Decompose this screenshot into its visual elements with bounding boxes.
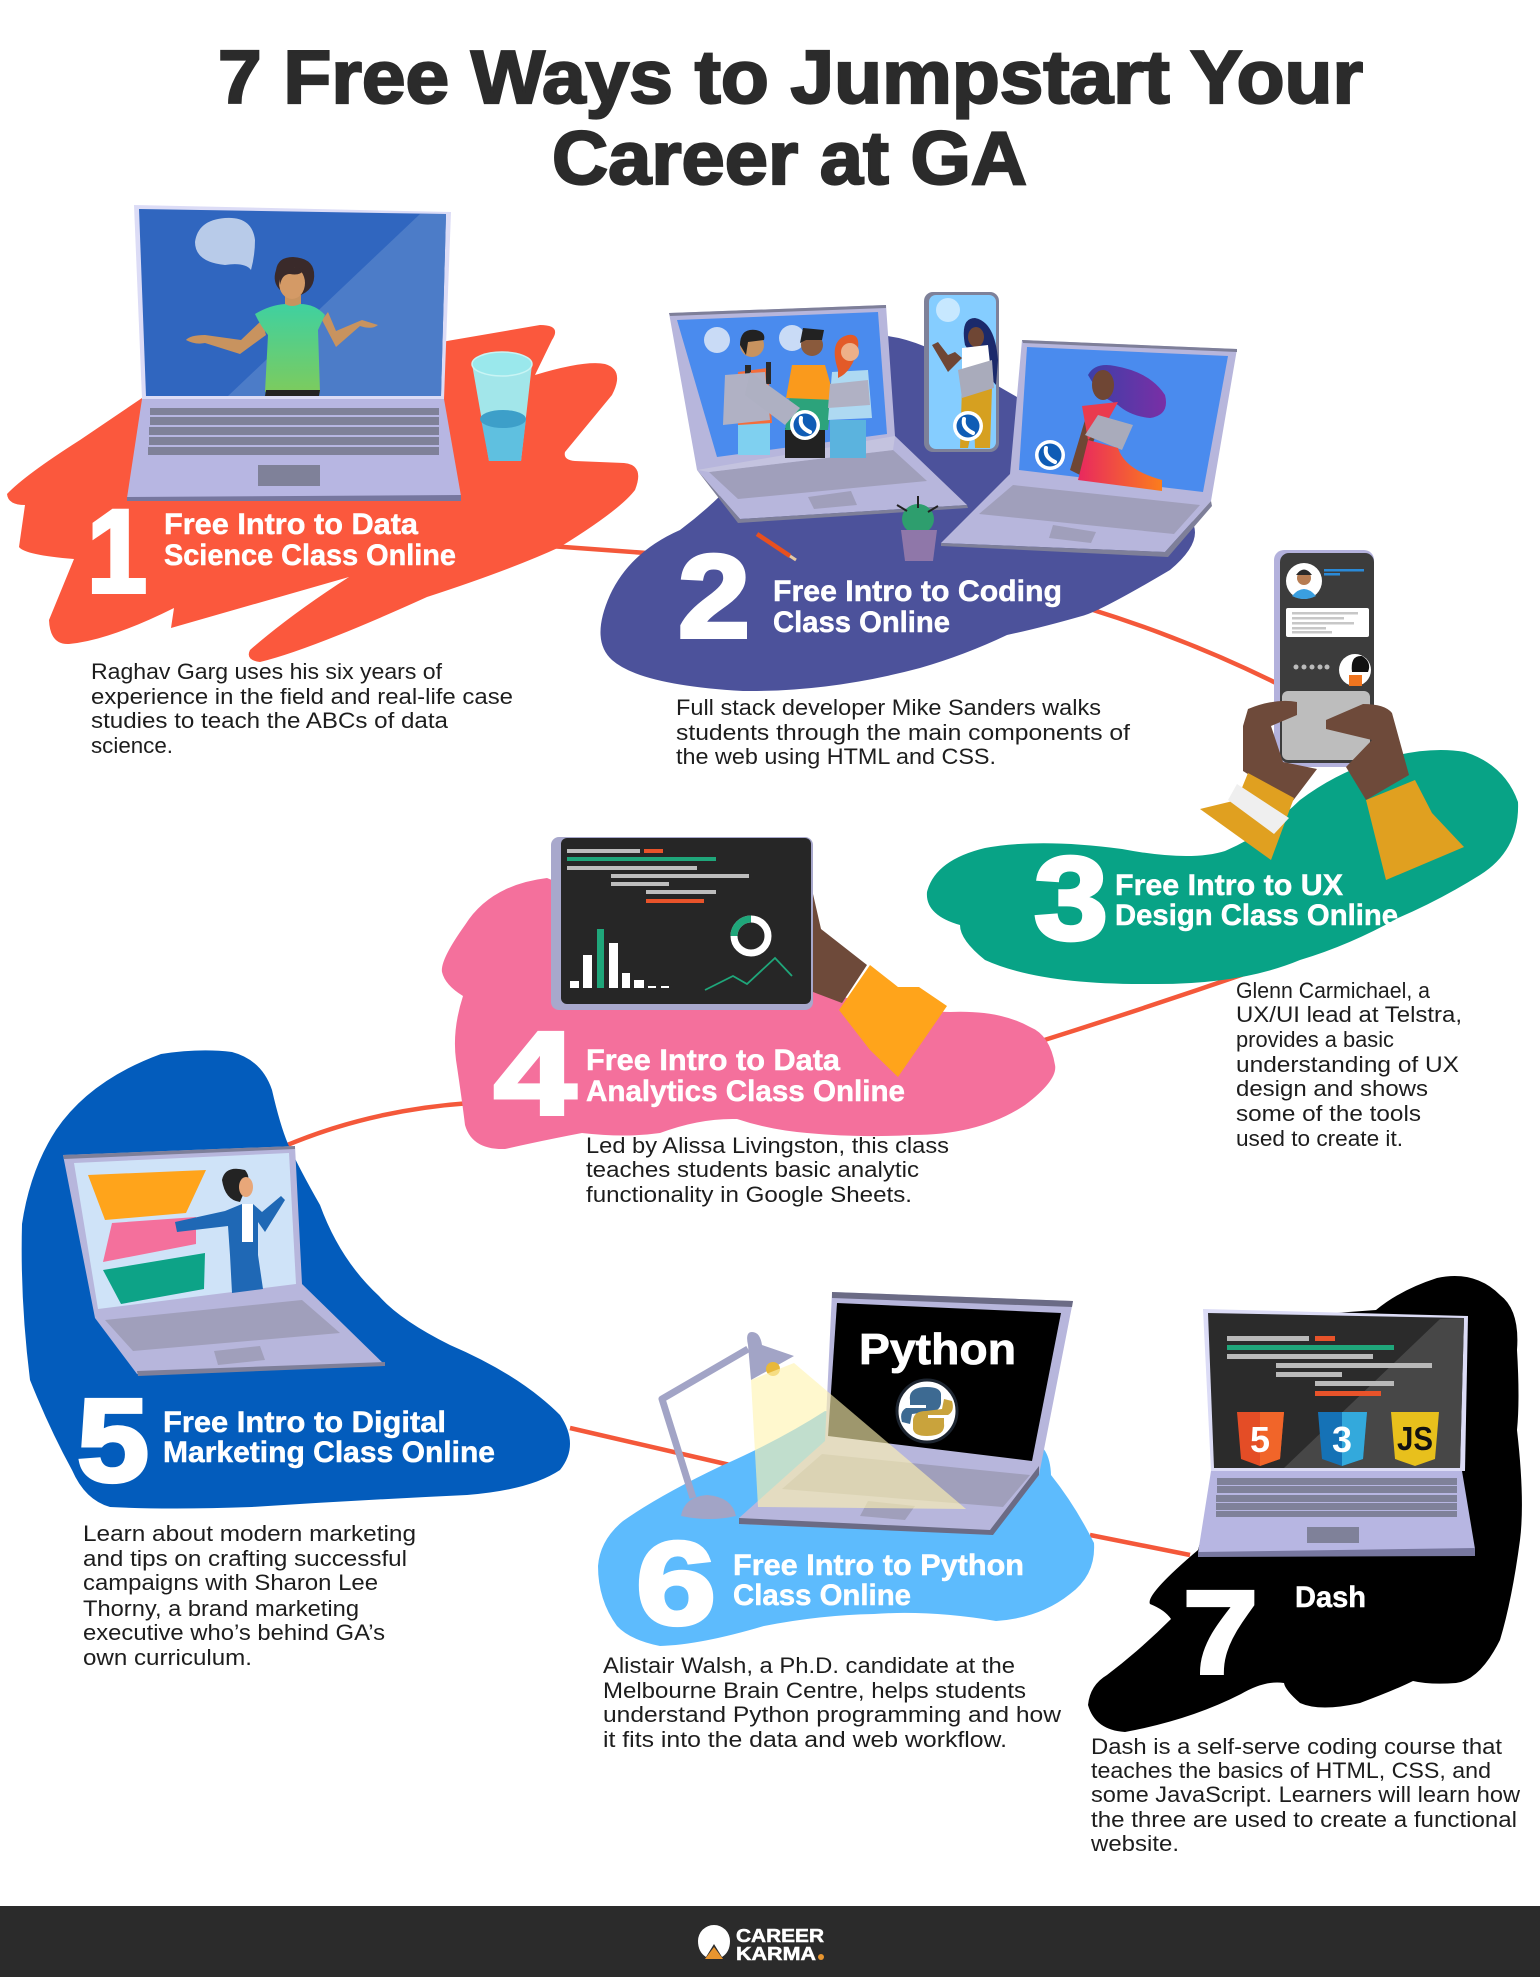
number 6: 6 xyxy=(636,1518,716,1650)
text block: step 3 description: Glenn Carmichael, a xyxy=(1236,978,1431,1003)
logo wordmark: CAREER xyxy=(736,1926,824,1946)
text block: step 4 description xyxy=(586,1133,949,1207)
icon: left sleeve xyxy=(1200,773,1294,860)
text block: step 7 description: the three are used to create a functional xyxy=(1091,1807,1517,1832)
number 3: 3 xyxy=(1034,833,1108,965)
text block: step 7 description: teaches the basics of HTML, CSS, and xyxy=(1091,1758,1491,1783)
icon: right sleeve xyxy=(1366,780,1464,880)
icon: laptop with presenter xyxy=(127,205,461,501)
title: 7 Free Ways to Jumpstart Your xyxy=(218,35,1363,119)
blob: green xyxy=(927,750,1518,984)
text block: step 3 description xyxy=(1236,978,1462,1151)
icon: phone with presenter xyxy=(924,292,999,452)
text block: step 2 description: Full stack developer Mike Sanders walks xyxy=(676,695,1101,720)
heading: step 3 xyxy=(1115,869,1398,932)
heading: step 3: Free Intro to UX xyxy=(1115,869,1343,902)
text block: step 6 description: understand Python programming and how xyxy=(603,1702,1061,1727)
panel: step 4 data analytics xyxy=(442,837,1055,1149)
text block: step 4 description: functionality in Google Sheets. xyxy=(586,1182,912,1207)
logo wordmark: KARMA xyxy=(736,1944,816,1964)
text block: step 1 description: studies to teach the ABCs of data xyxy=(91,708,449,733)
icon: laptop with python screen xyxy=(739,1292,1073,1535)
text block: step 5 description: own curriculum. xyxy=(83,1645,252,1670)
heading: step 2 xyxy=(773,575,1062,639)
icon: sleeve xyxy=(839,965,947,1077)
text block: step 1 description: Raghav Garg uses his six years of xyxy=(91,659,443,684)
heading: step 6 xyxy=(733,1549,1024,1612)
chart: bars xyxy=(570,929,669,988)
blob: pink xyxy=(442,878,1055,1149)
chart: line xyxy=(705,958,792,990)
blob: indigo xyxy=(600,336,1195,691)
text block: step 3 description: design and shows xyxy=(1236,1076,1428,1101)
icon: pencil xyxy=(757,534,796,560)
title xyxy=(218,35,1363,200)
heading: step 6: Class Online xyxy=(733,1579,911,1612)
text block: step 6 description xyxy=(603,1653,1061,1752)
text block: step 5 description: Thorny, a brand marketing xyxy=(83,1596,359,1621)
icon: career karma logo xyxy=(698,1925,730,1959)
text block: step 7 description: Dash is a self-serve coding course that xyxy=(1091,1734,1502,1759)
icon: call badge xyxy=(953,411,983,441)
icon: water glass xyxy=(472,352,532,461)
text block: step 4 description: teaches students basic analytic xyxy=(586,1157,919,1182)
icon: wristwatch xyxy=(1228,784,1289,834)
icon: python logo xyxy=(897,1380,957,1442)
icon: css3 shield: 3 xyxy=(1332,1419,1352,1460)
icon: left laptop with students xyxy=(669,305,968,523)
icon: laptop with presenter and chart xyxy=(63,1146,385,1376)
number 5: 5 xyxy=(77,1375,149,1507)
text block: step 1 description: science. xyxy=(91,733,173,758)
heading: step 2: Class Online xyxy=(773,606,950,639)
text block: step 4 description: Led by Alissa Livingston, this class xyxy=(586,1133,949,1158)
text block: step 5 description: and tips on crafting successful xyxy=(83,1546,407,1571)
text block: step 2 description: the web using HTML and CSS. xyxy=(676,744,996,769)
text block: step 1 description: experience in the field and real-life case xyxy=(91,684,513,709)
chart: donut xyxy=(734,919,768,953)
text block: step 3 description: used to create it. xyxy=(1236,1126,1403,1151)
text block: step 6 description: Melbourne Brain Centre, helps students xyxy=(603,1678,1026,1703)
text block: step 6 description: it fits into the data and web workflow. xyxy=(603,1727,1007,1752)
text block: step 6 description: Alistair Walsh, a Ph.D. candidate at the xyxy=(603,1653,1015,1678)
text block: step 7 description: website. xyxy=(1090,1831,1179,1856)
heading: step 4: Analytics Class Online xyxy=(586,1075,905,1108)
icon: cactus in pot xyxy=(897,496,938,561)
blob: black xyxy=(1088,1276,1522,1732)
number 2: 2 xyxy=(678,531,750,663)
text block: step 3 description: understanding of UX xyxy=(1236,1052,1459,1077)
panel: step 5 digital marketing xyxy=(22,1050,570,1508)
heading: step 3: Design Class Online xyxy=(1115,899,1398,932)
icon: hand holding tablet xyxy=(813,894,867,1003)
text block: step 2 description xyxy=(676,695,1131,769)
icon: laptop with code xyxy=(1198,1309,1475,1557)
heading: step 1: Free Intro to Data xyxy=(164,508,418,541)
text block: step 5 description: campaigns with Sharon Lee xyxy=(83,1570,378,1595)
heading: step 1: Science Class Online xyxy=(164,539,456,572)
text block: step 1 description xyxy=(91,659,513,758)
heading: step 6: Free Intro to Python xyxy=(733,1549,1024,1582)
icon: javascript shield xyxy=(1391,1412,1439,1466)
icon: desk lamp xyxy=(662,1332,966,1519)
label: Python: Python xyxy=(859,1325,1016,1374)
arrow: connector path linking steps xyxy=(285,546,1280,1555)
logo wordmark xyxy=(736,1926,824,1964)
panel: step 3 UX design xyxy=(927,550,1518,984)
heading: step 7: Dash xyxy=(1295,1581,1366,1614)
icon: css3 shield xyxy=(1318,1412,1367,1466)
icon: right laptop with woman xyxy=(941,340,1237,557)
icon: call badge xyxy=(790,410,820,440)
panel: step 7 dash xyxy=(1088,1276,1522,1732)
panel: step 6 python xyxy=(598,1292,1094,1650)
footer bar xyxy=(0,1906,1540,1977)
text block: step 7 description xyxy=(1090,1734,1520,1856)
panel: step 2 coding xyxy=(600,292,1237,691)
heading: step 1 xyxy=(164,508,456,572)
text block: step 7 description: some JavaScript. Learners will learn how xyxy=(1091,1782,1520,1807)
number 7: 7 xyxy=(1183,1567,1258,1699)
icon: left hand xyxy=(1243,701,1317,802)
icon: html5 shield xyxy=(1237,1412,1284,1466)
heading: step 4: Free Intro to Data xyxy=(586,1044,840,1077)
text block: step 3 description: provides a basic xyxy=(1236,1027,1394,1052)
icon: javascript shield: JS xyxy=(1397,1420,1433,1457)
heading: step 5 xyxy=(163,1406,495,1469)
text block: step 5 description: executive who’s behind GA’s xyxy=(83,1620,385,1645)
heading: step 5: Free Intro to Digital xyxy=(163,1406,446,1439)
text block: step 5 description xyxy=(83,1521,416,1670)
text block: step 3 description: UX/UI lead at Telstra, xyxy=(1236,1002,1462,1027)
blob: red xyxy=(7,325,638,662)
icon: call badge xyxy=(1035,440,1065,470)
text block: step 2 description: students through the main components of xyxy=(676,720,1131,745)
panel: step 1 data science xyxy=(7,205,638,662)
heading: step 4 xyxy=(586,1044,905,1108)
icon: phone held in hands xyxy=(1200,550,1464,880)
title: Career at GA xyxy=(552,116,1027,200)
number 1: 1 xyxy=(87,486,147,618)
heading: step 2: Free Intro to Coding xyxy=(773,575,1062,608)
heading: step 5: Marketing Class Online xyxy=(163,1436,495,1469)
icon: html5 shield: 5 xyxy=(1250,1419,1270,1460)
icon: right hand xyxy=(1326,704,1409,800)
number 4: 4 xyxy=(494,1008,576,1140)
icon: tablet dashboard xyxy=(551,837,813,1010)
blob: blue xyxy=(22,1050,570,1508)
text block: step 3 description: some of the tools xyxy=(1236,1101,1421,1126)
text block: step 5 description: Learn about modern marketing xyxy=(83,1521,416,1546)
blob: light blue xyxy=(598,1411,1094,1646)
